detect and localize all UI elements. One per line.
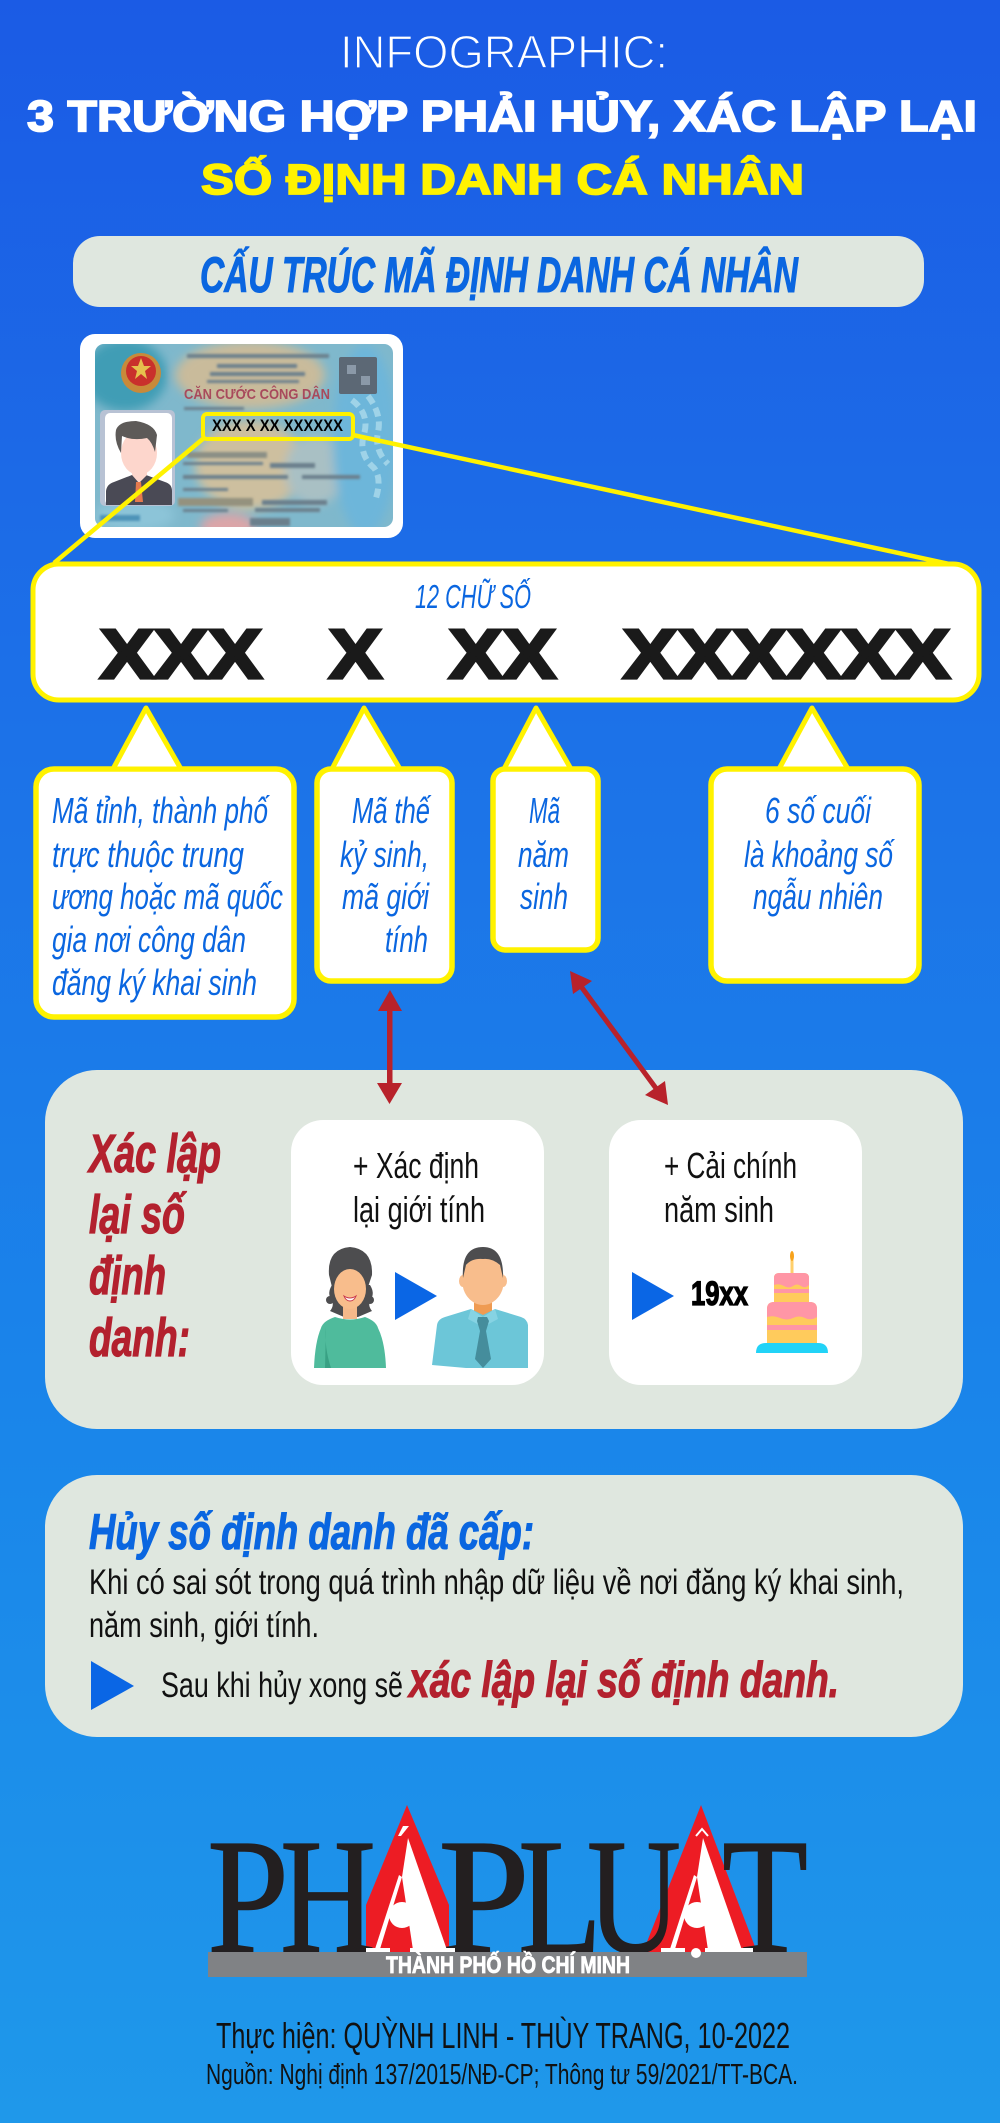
- callout: province code: Mã tỉnh, thành phố: [52, 790, 270, 831]
- QR code: [339, 357, 377, 394]
- callout: province code: gia nơi công dân: [52, 919, 246, 960]
- title kicker: INFOGRAPHIC:: [340, 26, 668, 78]
- heading pill: structure of the ID number: [73, 236, 924, 307]
- national emblem: [121, 353, 161, 393]
- logo red triangles: [366, 1805, 449, 1952]
- panel: cancel issued ID number: [45, 1475, 963, 1737]
- card: birth year correction: năm sinh: [664, 1189, 774, 1230]
- card: gender redefinition: [291, 1120, 544, 1385]
- callout: birth year code: sinh: [520, 876, 568, 917]
- arrow: to birth year: [632, 1272, 674, 1320]
- icon: woman: [314, 1247, 386, 1368]
- callout: century and gender code: tính: [385, 919, 428, 960]
- callout: century and gender code: Mã thế: [352, 790, 432, 831]
- photo of card holder: [100, 410, 175, 506]
- logo white letter A with acute: [366, 1826, 455, 1952]
- digit placeholders: XXX: [100, 615, 262, 693]
- logo white letter A with circumflex: [661, 1829, 753, 1952]
- callout: province code: đăng ký khai sinh: [52, 962, 257, 1003]
- conclusion text: Sau khi hủy xong sẽ: [161, 1666, 403, 1705]
- arrow bullet: [91, 1661, 134, 1710]
- callout: birth year code: [493, 708, 598, 950]
- logo wordmark: P: [438, 1805, 530, 1988]
- logo: Pháp Luật: [207, 1805, 808, 1988]
- logo wordmark: [207, 1805, 808, 1988]
- panel heading: Xác lập: [87, 1124, 221, 1184]
- digit placeholders: X: [329, 615, 382, 693]
- callout: province code: ương hoặc mã quốc: [52, 876, 283, 917]
- highlighted number on the card: XXX X XX XXXXXX: [212, 416, 344, 435]
- card: gender redefinition: + Xác định: [353, 1145, 479, 1186]
- panel: re-establish ID number: [45, 1070, 963, 1429]
- callout: last six digits: 6 số cuối: [765, 790, 872, 831]
- logo wordmark: U: [587, 1805, 681, 1988]
- title line 1: 3 TRƯỜNG HỢP PHẢI HỦY, XÁC LẬP LẠI: [27, 90, 977, 141]
- panel: cancel issued ID number: năm sinh, giới tính.: [89, 1606, 319, 1645]
- card wave pattern: [352, 396, 388, 498]
- number box: 12 digits: [33, 564, 979, 700]
- arrow: birth year code to birth year correction: [570, 971, 668, 1105]
- card: gender redefinition: lại giới tính: [353, 1189, 485, 1230]
- icon: man: [432, 1247, 528, 1368]
- callout: province code: [36, 708, 294, 1017]
- card: birth year correction: [609, 1120, 862, 1385]
- card title: CĂN CƯỚC CÔNG DÂN: [184, 385, 330, 403]
- ID card illustration: [80, 334, 403, 541]
- callout: century and gender code: mã giới: [342, 876, 430, 917]
- panel heading: lại số: [89, 1185, 187, 1245]
- callout: last six digits: là khoảng số: [744, 834, 895, 875]
- panel heading: [87, 1124, 221, 1368]
- logo wordmark: L: [518, 1805, 602, 1988]
- arrow: gender code to gender redefinition: [377, 990, 402, 1104]
- new birth year: 19xx: [691, 1275, 748, 1313]
- callout: century and gender code: kỷ sinh,: [340, 834, 429, 875]
- logo wordmark: H: [280, 1805, 376, 1988]
- logo grey bar with city name: THÀNH PHỐ HỒ CHÍ MINH: [386, 1951, 630, 1979]
- callout: last six digits: ngẫu nhiên: [753, 876, 883, 917]
- logo wordmark: P: [207, 1805, 289, 1988]
- card: birth year correction: + Cải chính: [664, 1145, 797, 1186]
- panel heading: định: [89, 1246, 166, 1306]
- callout: birth year code: Mã: [529, 790, 560, 831]
- logo grey bar with city name: [208, 1948, 807, 1979]
- source line: Nguồn: Nghị định 137/2015/NĐ-CP; Thông tư 59/2021/TT-BCA.: [206, 2059, 798, 2091]
- credits: [206, 2015, 798, 2091]
- callout: province code: trực thuộc trung: [52, 834, 244, 875]
- zoom line: card to number box, left: [54, 438, 204, 563]
- panel heading: danh:: [89, 1308, 190, 1368]
- conclusion highlight: xác lập lại số định danh.: [407, 1652, 839, 1708]
- callout: century and gender code: [317, 708, 452, 981]
- digit placeholders: XXXXXX: [623, 615, 950, 693]
- icon: birthday cake: [756, 1251, 828, 1353]
- arrow: woman to man: [395, 1272, 437, 1320]
- digit placeholders: [100, 615, 950, 693]
- title line 2: SỐ ĐỊNH DANH CÁ NHÂN: [201, 155, 804, 204]
- callout: birth year code: năm: [518, 834, 569, 875]
- digit placeholders: XX: [449, 615, 556, 693]
- label: 12 digits: 12 CHỮ SỐ: [415, 577, 531, 615]
- panel heading: Hủy số định danh đã cấp:: [89, 1504, 534, 1560]
- callout: last six digits: [711, 708, 919, 981]
- zoom line: card to number box, right: [353, 435, 963, 567]
- smudged card text lines: [100, 354, 360, 526]
- logo wordmark: T: [722, 1805, 808, 1988]
- title: [27, 26, 977, 204]
